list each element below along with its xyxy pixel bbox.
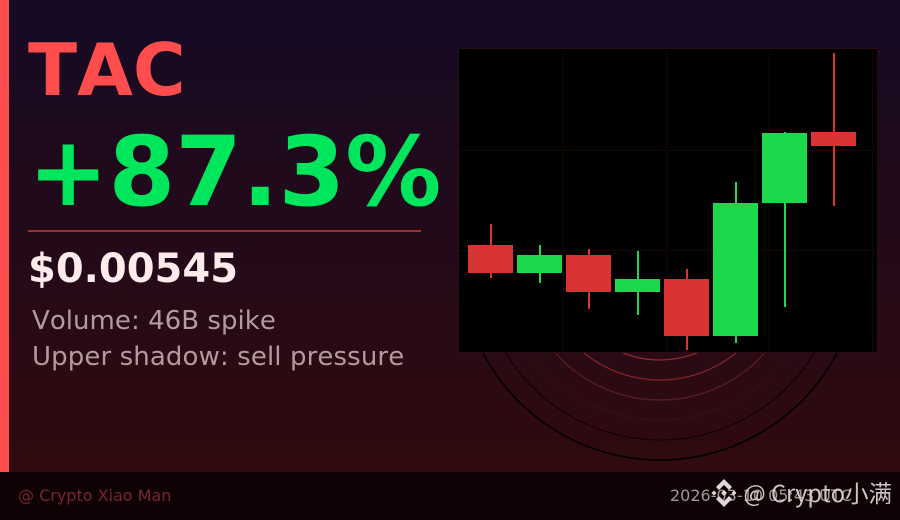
divider xyxy=(28,230,421,232)
footer handle: @ Crypto Xiao Man xyxy=(18,486,171,505)
shadow note: Upper shadow: sell pressure xyxy=(32,342,404,372)
candle 5 xyxy=(664,269,709,350)
candle 6 xyxy=(713,182,758,343)
watermark text: @ Crypto小满 xyxy=(744,475,892,509)
token title: TAC xyxy=(28,28,186,112)
candle 4 xyxy=(615,251,660,315)
footer timestamp: 2026-03-10 05:43 UTC xyxy=(670,486,852,505)
icon: binance watermark xyxy=(712,479,736,507)
candle 3 xyxy=(566,249,611,309)
candlestick chart xyxy=(458,48,878,352)
price: $0.00545 xyxy=(28,246,238,292)
candle 7 xyxy=(762,132,807,307)
concentric rings xyxy=(460,60,860,460)
candle 1 xyxy=(468,224,513,278)
volume note: Volume: 46B spike xyxy=(32,306,276,336)
chart frame xyxy=(458,48,878,352)
candle 2 xyxy=(517,245,562,283)
percentage change: +87.3% xyxy=(28,116,441,228)
footer bar xyxy=(0,472,900,520)
left accent bar xyxy=(0,0,9,472)
candle 8 xyxy=(811,53,856,206)
